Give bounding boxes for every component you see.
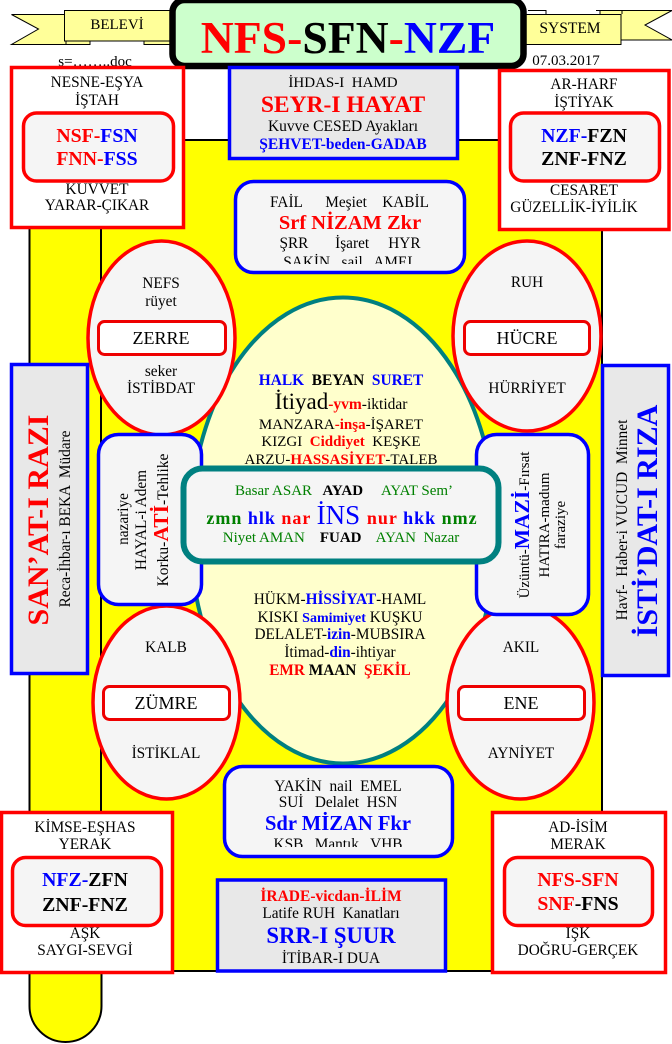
code box: NFS-SFN [504,858,652,926]
date: 07.03.2017 [532,53,600,69]
code box: NFZ-ZFN: NFZ-ZFN [42,869,129,891]
ribbon: SYSTEM: SYSTEM [539,20,601,37]
ribbon: BELEVİ [12,10,174,44]
ribbon: BELEVİ: BELEVİ [90,17,144,33]
side box: nazariye HAYAL [98,434,202,604]
panel: İSTİ'DAT-I RIZA [602,366,668,676]
circle: KALB ZÜMRE: KALB [145,639,187,656]
panel: SRR-I ŞUUR: İTİBAR-I DUA [282,950,380,967]
central box: İNS: zmn hlk nar İNS nur hkk nmz [206,500,478,530]
circle: AKIL ENE [447,606,594,799]
panel: SAN'AT-I RAZI: SAN’AT-I RAZI [22,415,55,625]
circle: AKIL ENE: ENE [504,693,538,713]
main yellow panel [101,140,602,971]
code box: NZF-FZN [510,113,660,181]
panel: SEYR-I HAYAT: ŞEHVET-beden-GADAB [259,136,427,153]
panel: bottom right AD-İSİM: DOĞRU-GERÇEK [518,942,638,959]
code box: NZF-FZN: NZF-FZN [541,125,628,147]
upper central text: KIZGI Ciddiyet KEŞKE [261,434,421,450]
panel: Srf NİZAM Zkr: SAKİN sail AMEL [283,254,417,271]
panel: SAN'AT-I RAZI [12,364,88,674]
panel: SAN'AT-I RAZI: Reca-İhbar-ı BEKA Müdare [57,430,74,607]
code box: NSF-FSN: FNN-FSS [56,148,138,170]
upper central text: HALK BEYAN SURET [259,372,424,389]
ribbon: SYSTEM [522,10,672,44]
side box: Üzüntü MAZİ: HATIRA-madum [537,472,553,578]
panel: bottom right AD-İSİM: IŞK [566,925,590,942]
panel: top left NESNE-EŞYA: İŞTAH [75,92,119,109]
panel: top right AR-HARF: AR-HARF [550,76,618,93]
panel: top right AR-HARF: İŞTİYAK [554,94,614,111]
code box: NSF-FSN: NSF-FSN [56,125,138,147]
panel: Sdr MİZAN Fkr: Sdr MİZAN Fkr [265,811,411,835]
code box: NSF-FSN [24,113,174,181]
circle: KALB ZÜMRE [93,606,240,799]
panel: İSTİ'DAT-I RIZA: İSTİ’DAT-I RIZA [631,404,664,637]
upper central text [244,372,438,468]
panel: Sdr MİZAN Fkr: SUİ Delalet HSN [279,794,397,811]
central box: İNS [184,468,498,562]
panel: Srf NİZAM Zkr: FAİL Meşiet KABİL [270,194,429,211]
code box: NFZ-ZFN [12,858,162,926]
circle: RUH HÜCRE: RUH [511,274,543,291]
lower central text: KISKI Samimiyet KUŞKU [258,609,422,626]
circle: RUH HÜCRE: HÜCRE [496,328,558,348]
code box: NFZ-ZFN: ZNF-FNZ [42,894,128,916]
lower central text: İtimad-din-ihtiyar [284,644,396,661]
circle: NEFS ZERRE: rüyet [145,293,177,310]
panel: SEYR-I HAYAT: Kuvve CESED Ayakları [268,118,419,135]
panel: bottom left KİMSE-EŞHAS: YERAK [59,836,111,853]
code box: NFS-SFN: NFS-SFN [537,869,619,891]
code box: NFS-SFN: SNF-FNS [537,893,619,915]
left yellow pillar [30,200,102,1042]
lower central text: DELALET-izin-MUBSIRA [254,626,426,643]
side box: nazariye HAYAL: HAYAL-i Adem [133,470,150,570]
circle: KALB ZÜMRE: ZÜMRE [134,693,198,713]
side box: nazariye HAYAL: Korku-ATİ-Tehlike [149,453,173,586]
panel: SRR-I ŞUUR: İRADE-vicdan-İLİM [260,888,402,905]
panel: SEYR-I HAYAT [230,68,458,158]
side box: Üzüntü MAZİ: faraziye [553,501,569,549]
circle: RUH HÜCRE: HÜRRİYET [488,380,566,397]
central box: İNS: Niyet AMAN FUAD AYAN Nazar [223,530,459,546]
panel: top left NESNE-EŞYA: NESNE-EŞYA [51,74,143,91]
panel: top left NESNE-EŞYA: KUVVET [66,181,129,198]
circle: RUH HÜCRE [453,241,601,431]
panel: bottom right AD-İSİM [492,812,666,972]
circle: NEFS ZERRE: ZERRE [132,328,190,348]
panel: Srf NİZAM Zkr [236,182,464,272]
upper central text: MANZARA-inşa-İŞARET [259,417,423,433]
panel: bottom right AD-İSİM: MERAK [550,836,606,853]
central box: İNS: Basar ASAR AYAD AYAT Sem’ [235,483,453,499]
code box: NZF-FZN: ZNF-FNZ [541,148,627,170]
side box: Üzüntü MAZİ [476,434,588,614]
lower central text: EMR MAAN ŞEKİL [269,662,411,679]
panel: bottom left KİMSE-EŞHAS [2,812,172,972]
panel: Sdr MİZAN Fkr: YAKİN nail EMEL [274,778,402,795]
panel: İSTİ'DAT-I RIZA: Havf- Haber-i VUCUD Minnet [614,419,631,620]
circle: NEFS ZERRE: seker [145,363,177,380]
panel: SEYR-I HAYAT: SEYR-I HAYAT [261,92,425,118]
circle: AKIL ENE: AKIL [503,639,539,656]
side box: nazariye HAYAL: nazariye [115,493,132,545]
circle: NEFS ZERRE [88,241,235,435]
upper central text: ARZU-HASSASİYET-TALEB [244,451,438,468]
circle: NEFS ZERRE: NEFS [142,275,180,292]
panel: top right AR-HARF: CESARET [550,182,619,199]
panel: SRR-I ŞUUR: SRR-I ŞUUR [266,923,396,948]
title: NFS-SFN-NZF [201,12,495,63]
panel: bottom left KİMSE-EŞHAS: SAYGI-SEVGİ [37,942,133,959]
lower central text: HÜKM-HİSSİYAT-HAML [254,591,426,608]
circle: KALB ZÜMRE: İSTİKLAL [132,745,200,762]
panel: top right AR-HARF: GÜZELLİK-İYİLİK [510,199,638,216]
file name note: s=……..doc [58,54,132,70]
panel: Srf NİZAM Zkr: ŞRR İşaret HYR [279,235,421,252]
panel: Sdr MİZAN Fkr: KSB Mantık VHB [274,836,402,853]
panel: bottom left KİMSE-EŞHAS: KİMSE-EŞHAS [34,819,136,836]
panel: SRR-I ŞUUR: Latife RUH Kanatları [262,905,400,922]
circle: AKIL ENE: AYNİYET [488,745,555,762]
central yellow ellipse [190,298,496,764]
panel: top right AR-HARF [500,70,669,230]
side box: Üzüntü MAZİ: Üzüntü-MAZİ-Fırsat [510,451,534,598]
panel: SEYR-I HAYAT: İHDAS-I HAMD [288,75,398,91]
panel: bottom left KİMSE-EŞHAS: AŞK [70,925,100,942]
upper central text: İtiyad-yvm-iktidar [275,389,408,414]
panel: bottom right AD-İSİM: AD-İSİM [548,819,608,836]
title [172,0,524,66]
panel: SRR-I ŞUUR [218,880,446,971]
panel: Srf NİZAM Zkr: Srf NİZAM Zkr [279,210,421,234]
panel: top left NESNE-EŞYA: YARAR-ÇIKAR [45,197,150,214]
circle: NEFS ZERRE: İSTİBDAT [127,380,196,397]
panel: Sdr MİZAN Fkr [224,766,452,856]
lower central text [254,591,426,679]
panel: top left NESNE-EŞYA [12,68,184,228]
